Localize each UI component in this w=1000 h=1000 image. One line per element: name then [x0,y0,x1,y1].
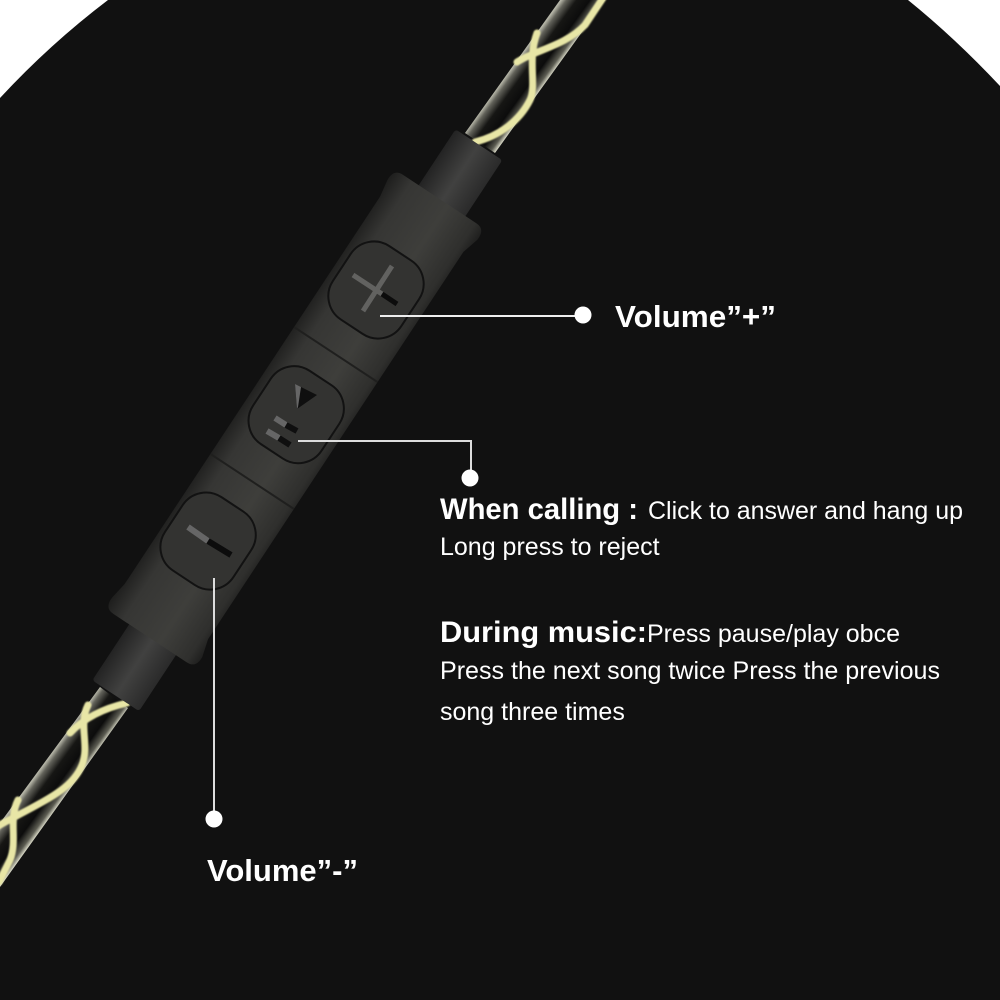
icon: minus [188,527,231,555]
neck: bottom strain relief [92,620,179,711]
text block: when calling: Click to answer and hang up [648,497,963,525]
label: volume up: Volume”+” [615,299,776,334]
icon: play and pause [267,384,317,445]
text block: when calling: When calling : [440,493,638,526]
text block: during music [440,616,940,726]
cable: top segment [465,0,605,153]
callout line: volume down [206,578,222,828]
inline remote control [68,113,522,724]
text block: during music: During music: [440,616,647,649]
button: play/pause [238,355,355,474]
text block: during music: song three times [440,698,625,726]
text block: when calling: Long press to reject [440,533,660,561]
cable: bottom segment [0,687,128,887]
callout line: play/pause [298,441,478,486]
text block: during music: Press pause/play obce [647,620,900,648]
button: volume down [150,482,267,600]
callout line: volume up [380,306,592,324]
label: volume down: Volume”-” [207,853,358,888]
neck: top strain relief [416,129,502,220]
button: volume up [318,231,434,349]
text block: during music: Press the next song twice Press the previous [440,657,940,685]
icon: plus [353,266,397,311]
segment seams [210,327,378,509]
text block: when calling [440,493,963,561]
remote body [105,169,485,668]
